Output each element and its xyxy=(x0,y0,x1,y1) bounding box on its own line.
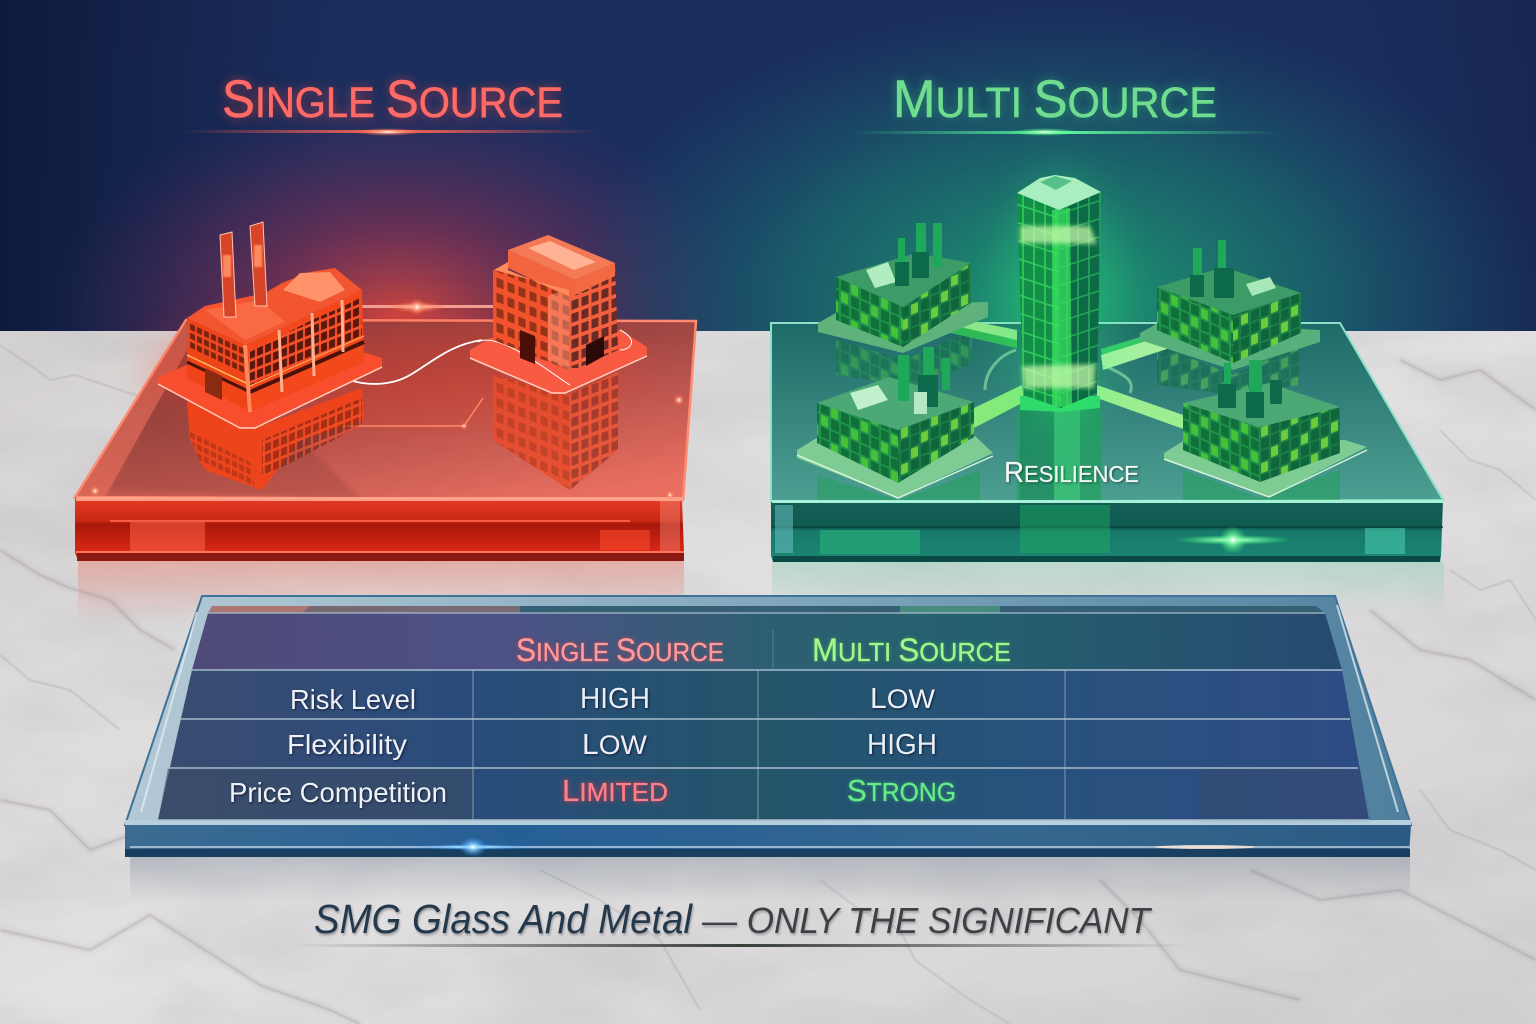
footer tagline xyxy=(290,896,1190,947)
row label: risk level: Risk Level xyxy=(290,684,416,715)
office roof xyxy=(508,235,615,280)
icon: office building xyxy=(470,235,647,394)
value: single risk high: HIGH xyxy=(580,683,650,715)
building reflections xyxy=(817,330,1340,500)
icon: factory bottom-left xyxy=(797,347,993,498)
office right wall xyxy=(569,263,618,368)
header: single source: SINGLE SOURCE xyxy=(516,632,724,668)
table header row background xyxy=(192,613,1342,670)
icon: factory top-right xyxy=(1140,240,1320,370)
chimney 1 xyxy=(220,232,236,317)
table grid lines xyxy=(158,613,1369,820)
panel: green glass slab xyxy=(771,323,1444,617)
factory base xyxy=(158,330,382,428)
factory left wall xyxy=(187,318,250,412)
value: multi risk low: LOW xyxy=(870,683,936,715)
table front edge xyxy=(125,825,1411,856)
title: multi source xyxy=(850,70,1280,136)
footer tagline: SMG Glass And Metal xyxy=(314,896,694,942)
panel: red glass slab xyxy=(75,320,696,620)
title: multi source: MULTI SOURCE xyxy=(893,70,1217,129)
tower right face xyxy=(1059,192,1101,408)
background: marble surface xyxy=(0,331,1536,1024)
panel: comparison table xyxy=(125,596,1411,902)
tower light bands xyxy=(1020,226,1097,244)
icon: factory bottom-right xyxy=(1164,360,1367,497)
chimney 2 xyxy=(250,222,267,306)
tower left face xyxy=(1017,193,1061,408)
slab front edge xyxy=(75,497,684,561)
slab reflection on marble xyxy=(78,560,684,620)
connectors: hub and spoke walkways xyxy=(947,316,1186,430)
tower glow xyxy=(1000,170,1120,430)
title: single source: SINGLE SOURCE xyxy=(222,70,563,129)
table body background xyxy=(158,670,1369,820)
footer tagline: — ONLY THE SIGNIFICANT xyxy=(701,900,1153,941)
table glass frame xyxy=(125,596,1411,825)
row label: flexibility: Flexibility xyxy=(287,729,407,760)
factory roof xyxy=(187,268,362,345)
row label: price competition: Price Competition xyxy=(229,777,447,808)
icon: factory top-left xyxy=(818,223,988,353)
value: multi flexibility high: HIGH xyxy=(867,729,937,761)
label: resilience: RESILIENCE xyxy=(1004,457,1139,489)
value: single flexibility low: LOW xyxy=(582,729,648,761)
icon: factory xyxy=(158,222,382,428)
background: navy wall xyxy=(0,0,1536,600)
tower reflection xyxy=(1017,408,1101,500)
header: multi source: MULTI SOURCE xyxy=(812,632,1011,668)
icon: central tower xyxy=(1000,170,1120,430)
table reflection on marble xyxy=(130,857,1410,902)
slab top surface xyxy=(75,320,696,500)
icon: office reflection xyxy=(493,372,618,490)
office base xyxy=(470,330,647,394)
green slab reflection on marble xyxy=(772,562,1444,617)
green slab top surface xyxy=(771,323,1443,502)
factory right wall xyxy=(245,290,364,412)
value: multi competition strong: STRONG xyxy=(847,773,956,808)
connection lines: single source xyxy=(250,298,494,430)
office left wall xyxy=(493,270,569,370)
value: single competition limited: LIMITED xyxy=(562,773,668,808)
office upper block xyxy=(508,250,575,300)
green slab front edge xyxy=(771,500,1443,562)
glow under red buildings xyxy=(140,315,640,425)
icon: factory reflection xyxy=(187,388,364,490)
tower roof xyxy=(1017,175,1101,210)
